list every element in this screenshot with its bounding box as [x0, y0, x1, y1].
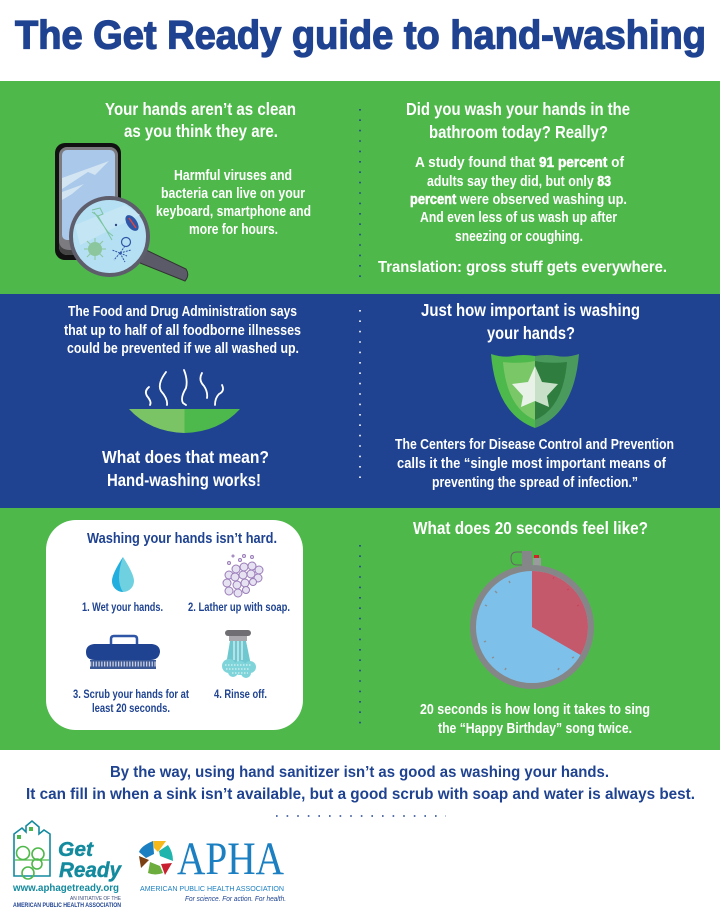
- text: CDC quote: The Centers for Disease Control and Prevention: [395, 437, 674, 453]
- card heading: Washing your hands isn’t hard.: [87, 530, 277, 547]
- heading: did you wash: bathroom today? Really?: [429, 122, 608, 142]
- text: happy birthday: 20 seconds is how long it takes to sing: [420, 702, 650, 718]
- text: harmful viruses: [156, 168, 311, 238]
- step 3 label: [73, 689, 189, 715]
- card: washing steps: [46, 520, 303, 730]
- text: hand sanitizer note: [26, 764, 695, 803]
- icon: stopwatch: [473, 551, 591, 686]
- panel: hands aren't clean: [0, 81, 720, 294]
- panel: washing steps and timer: [0, 508, 720, 750]
- logo: Get Ready: [12, 821, 122, 909]
- text: CDC quote: [395, 437, 674, 491]
- logo: APHA: [139, 833, 286, 903]
- heading: hands not clean: Your hands aren’t as clean: [105, 99, 296, 119]
- heading: how important: [421, 300, 640, 343]
- text: study findings: adults say they did, but only 83: [427, 174, 611, 190]
- icon: phone and magnifying glass: [55, 143, 188, 281]
- title: The Get Ready guide to hand-washing: [15, 14, 706, 58]
- logo: APHA: For science. For action. For health.: [185, 896, 286, 903]
- panel: food and drug: [0, 294, 720, 508]
- logo: Get Ready: Ready: [59, 859, 122, 882]
- text: hand sanitizer note: By the way, using hand sanitizer isn’t as good as washing your hands.: [110, 764, 609, 781]
- text: study findings: A study found that 91 percent of: [415, 155, 624, 171]
- text: foodborne illnesses: [64, 304, 301, 357]
- logo: Get Ready: www.aphagetready.org: [12, 882, 119, 894]
- logo: APHA: APHA: [177, 833, 284, 885]
- text: harmful viruses: bacteria can live on your: [161, 186, 305, 202]
- text: study findings: And even less of us wash up after: [420, 210, 617, 226]
- heading: did you wash: [406, 99, 630, 142]
- text: what does that mean: Hand-washing works!: [107, 470, 261, 490]
- icon: steaming bowl: [129, 370, 240, 433]
- text: harmful viruses: keyboard, smartphone and: [156, 204, 311, 220]
- text: foodborne illnesses: that up to half of all foodborne illnesses: [64, 323, 301, 339]
- text: hand sanitizer note: It can fill in when a sink isn’t available, but a good scrub with soap and water is always best.: [26, 786, 695, 803]
- step 3 label: least 20 seconds.: [92, 703, 170, 715]
- text: what does that mean: [102, 447, 269, 490]
- text: CDC quote: calls it the “single most important means of: [397, 456, 666, 472]
- step 3 label: 3. Scrub your hands for at: [73, 689, 189, 701]
- step 1 label: 1. Wet your hands.: [82, 602, 163, 614]
- logo: APHA: AMERICAN PUBLIC HEALTH ASSOCIATION: [140, 884, 284, 893]
- heading: hands not clean: as you think they are.: [124, 121, 278, 141]
- step 2 label: 2. Lather up with soap.: [188, 602, 290, 614]
- heading: hands not clean: [105, 99, 296, 141]
- text: foodborne illnesses: could be prevented if we all washed up.: [67, 341, 299, 357]
- text: translation: Translation: gross stuff gets everywhere.: [378, 259, 667, 276]
- text: study findings: sneezing or coughing.: [455, 229, 583, 245]
- logo: Get Ready: Get: [58, 839, 94, 861]
- icon: shield with star: [491, 354, 579, 428]
- text: foodborne illnesses: The Food and Drug Administration says: [68, 304, 297, 320]
- heading: 20 seconds: What does 20 seconds feel like?: [413, 518, 648, 538]
- icon: APHA wheel: [139, 841, 173, 875]
- text: study findings: percent were observed washing up.: [410, 192, 627, 208]
- logo: Get Ready: AMERICAN PUBLIC HEALTH ASSOCIATION: [13, 903, 121, 909]
- heading: how important: your hands?: [487, 323, 575, 343]
- step 4 label: 4. Rinse off.: [214, 689, 267, 701]
- text: happy birthday: [420, 702, 650, 737]
- logo: Get Ready: AN INITIATIVE OF THE: [70, 896, 122, 902]
- heading: how important: Just how important is washing: [421, 300, 640, 320]
- icon: water drop: [112, 557, 134, 592]
- icon: scrub brush: [86, 636, 160, 669]
- icon: house with circles: [14, 821, 50, 879]
- text: what does that mean: What does that mean?: [102, 447, 269, 467]
- icon: soap lather: [223, 554, 263, 597]
- heading: did you wash: Did you wash your hands in the: [406, 99, 630, 119]
- icon: rinsing water: [222, 630, 256, 678]
- text: study findings: [410, 155, 627, 245]
- text: happy birthday: the “Happy Birthday” song twice.: [438, 721, 632, 737]
- text: harmful viruses: more for hours.: [189, 222, 278, 238]
- text: CDC quote: preventing the spread of infection.”: [432, 475, 638, 491]
- text: harmful viruses: Harmful viruses and: [174, 168, 292, 184]
